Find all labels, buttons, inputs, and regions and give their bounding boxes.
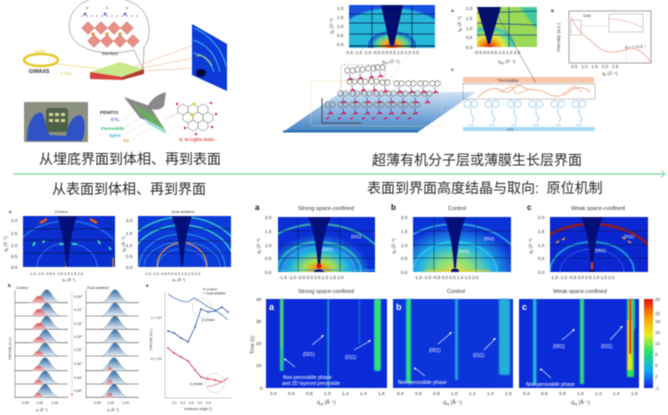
detector pattern <box>192 24 227 91</box>
axis labels: 0.0 <box>265 270 272 275</box>
colorbar: 25 <box>655 297 661 302</box>
line chart B: q <box>602 71 605 76</box>
panel: bottom-left GIWAXS maps <box>2 210 232 282</box>
colorbar: 12 <box>655 341 661 346</box>
time map c <box>519 299 639 388</box>
heatmap: dual additive: 1.0 <box>126 243 133 248</box>
device stack with labels: Au <box>123 138 129 143</box>
time and q axes: 0.8 <box>433 391 440 397</box>
heatmap a: strong space-confined: (001) <box>322 247 333 252</box>
heatmap: control: Control <box>55 209 68 214</box>
axis labels: q <box>528 251 533 254</box>
time map c: (001) <box>553 344 565 350</box>
line chart B: SAM <box>583 14 591 18</box>
GIWAXS heatmap: q <box>329 31 334 34</box>
colorbar: 2 <box>655 374 658 379</box>
GIWAXS heatmap: 0.5 <box>337 33 344 38</box>
control peak stack <box>15 290 68 412</box>
time and q axes: Time (s) <box>250 336 256 354</box>
heatmap: dual additive: 0.5 <box>126 254 133 259</box>
interface schematic C <box>451 16 595 132</box>
time map a <box>266 299 387 388</box>
x-ray beam <box>57 45 194 76</box>
heatmap: control: z <box>5 247 9 249</box>
axis labels: -1.5 -1.0 -0.5 0.0 0.5 1.0 1.5 2.0 <box>414 275 479 280</box>
time and q axes: q <box>571 400 574 406</box>
panel: peak stacks b: b <box>8 283 11 288</box>
heatmap c: weak space-confined: c <box>527 203 532 212</box>
time and q axes: q <box>317 400 320 406</box>
time and q axes: 0.4 <box>523 391 530 397</box>
incidence angle labels: 0.15° <box>74 322 83 326</box>
colorbar: 22 <box>655 311 661 316</box>
heatmap b: control: b <box>391 203 396 212</box>
panel: line chart e: Intensity (a.u.) <box>149 329 153 350</box>
axis labels: -1.5 -1.0 -0.5 0.0 0.5 1.0 1.5 2.0 <box>550 275 615 280</box>
heatmap A: A <box>451 8 454 13</box>
time and q axes: 40 <box>256 297 262 303</box>
time map a: and 2D layered perovskite <box>282 381 340 387</box>
molecular layer on substrate <box>283 48 476 132</box>
panel: top-middle ultrathin molecular layer <box>283 5 476 132</box>
time and q axes: 0.4 <box>270 391 277 397</box>
device stack with labels: ETL <box>111 117 120 122</box>
heading: surface to bulk to interface: 从表面到体相、再到界面 <box>52 181 206 197</box>
axis labels: z <box>393 249 397 251</box>
axis labels: 2.0 <box>538 215 545 220</box>
dual additive peak stack: qᵣ (Å⁻¹) <box>107 407 119 412</box>
GIWAXS heatmap: -2.0 -1.5 -1.0 -0.5 0.0 0.5 1.0 1.5 2.0 <box>345 50 419 55</box>
time map b: (011) <box>473 353 485 359</box>
time and q axes: 1.0 <box>577 391 584 397</box>
icon: SSRF ring: GIWAXS <box>29 69 50 75</box>
line chart B: qₓ ≈ 1.75 Å⁻¹ <box>625 44 646 49</box>
molecule: S,N-CQDs-SnO2: S, N-CQDs-SnO₂ <box>179 137 215 142</box>
panel: top-right molecule and scattering <box>451 6 651 132</box>
colorbar: 6 <box>655 363 658 368</box>
time and q axes: 0.4 <box>397 391 404 397</box>
heatmap A: 1.5 <box>466 16 473 21</box>
time and q axes: 1.0 <box>451 391 458 397</box>
GIWAXS heatmap: 1.5 <box>337 15 344 20</box>
axis labels: 1.5 <box>538 229 545 234</box>
heatmap: control: 0.5 <box>11 254 18 259</box>
panel: top-left buried interface to surface <box>24 0 227 143</box>
panel: time-resolved maps: Control <box>447 289 465 295</box>
incidence angle labels: 0.25° <box>74 348 83 352</box>
heading: buried interface to surface: 从埋底界面到体相、再到表面 <box>39 151 221 167</box>
axis labels: z <box>258 249 262 251</box>
panel: line chart e: Incidence angle (°) <box>184 407 212 411</box>
icon: SSRF ring <box>24 49 58 75</box>
heatmap A: 2.0 <box>466 6 473 11</box>
colorbar: 18 <box>655 319 661 324</box>
control peak stack: qᵣ (Å⁻¹) <box>36 407 48 412</box>
axis labels: -1.5 -1.0 -0.5 0.0 0.5 1.0 1.5 2.0 <box>279 275 344 280</box>
dual additive peak stack <box>86 290 139 412</box>
incidence angle labels: 0.10° <box>74 308 83 312</box>
panel: peak stacks b: Control <box>16 286 28 290</box>
molecule: S,N-CQDs-SnO2 <box>165 102 217 142</box>
callout bubble: interface structure: Interface <box>102 51 119 56</box>
timeline arrow divider <box>13 170 665 178</box>
colorbar: 15 <box>655 330 661 335</box>
heatmap A: 0.5 <box>466 35 473 40</box>
heatmap: dual additive: -1.5 -1.0 -0.5 0.0 0.5 1.0 1.5 2.0 <box>144 271 201 276</box>
time and q axes: xy <box>320 402 324 406</box>
time map b: Non-perovskite phase <box>398 380 447 386</box>
incidence angle labels: 0.05° <box>74 295 83 299</box>
GIWAXS heatmap: xy <box>385 61 388 65</box>
heatmap: dual additive: 1.5 <box>126 231 133 236</box>
time and q axes: 0.6 <box>415 391 422 397</box>
heatmap: control: q <box>3 249 8 252</box>
line chart B <box>551 8 651 77</box>
axis labels: 1.0 <box>401 243 408 248</box>
heatmap A: (Å⁻¹) <box>456 16 462 28</box>
axis labels <box>255 215 615 280</box>
dual additive peak stack: 1.03 <box>122 401 129 405</box>
time and q axes: 0.8 <box>306 391 313 397</box>
callout bubble: interface structure <box>69 0 149 69</box>
line chart B: 0.5 1.0 1.5 2.0 2.5 <box>571 64 619 69</box>
control peak stack: 1.05 <box>51 401 58 405</box>
time map c: (011) <box>601 344 613 350</box>
heatmap c: weak space-confined: Weak space-confined <box>571 206 625 212</box>
heatmap: control <box>2 210 116 282</box>
incidence angle labels: 0.50° <box>74 389 83 393</box>
heatmap b: control <box>390 203 512 273</box>
time and q axes: (Å⁻¹) <box>449 399 462 406</box>
heatmap: control: 1.0 <box>11 243 18 248</box>
series lines <box>167 294 229 392</box>
heatmap: control: a <box>9 209 12 214</box>
time and q axes <box>250 297 638 406</box>
heatmap: dual additive: Dual additive <box>171 209 195 214</box>
axis labels: (Å⁻¹) <box>390 238 396 250</box>
time map a: Non-perovskite phase <box>283 375 332 381</box>
heatmap: dual additive: q <box>121 249 126 252</box>
legend: Dual additive <box>206 292 226 296</box>
time and q axes: 1.0 <box>324 391 331 397</box>
heatmap: dual additive: z <box>123 247 127 249</box>
heatmap a: strong space-confined: (011) <box>351 234 362 239</box>
device stack with labels: Spiro <box>109 133 121 138</box>
heatmap b: control: (011) <box>484 236 495 241</box>
panel: line chart e: 0.1 0.2 0.3 0.4 0.5 <box>172 401 211 405</box>
axis labels: (Å⁻¹) <box>255 238 261 250</box>
time and q axes: 0 <box>260 386 263 392</box>
heatmap A: q <box>498 59 501 64</box>
axis labels: 1.5 <box>401 229 408 234</box>
incidence angle labels: 0.20° <box>74 335 83 339</box>
x-ray beam: X-Ray <box>60 71 73 76</box>
time and q axes: 0.6 <box>541 391 548 397</box>
panel: line chart e: 1 × 10⁴ <box>151 316 163 320</box>
axis labels: 1.0 <box>265 243 272 248</box>
colorbar <box>644 297 661 391</box>
device stack with labels <box>100 92 166 143</box>
dual additive peak stack: 1.02 <box>107 401 114 405</box>
time map a: (001) <box>303 352 315 358</box>
line chart B: B <box>551 8 554 13</box>
time map c: c <box>522 302 527 312</box>
GIWAXS heatmap <box>328 4 436 66</box>
time map a: (011) <box>345 355 357 361</box>
heatmap a: strong space-confined: a <box>255 203 260 212</box>
device stack with labels: Perovskite <box>101 126 125 131</box>
time and q axes: 1.2 <box>342 391 349 397</box>
colorbar: -1 <box>655 386 660 391</box>
control peak stack: 1.00 <box>36 401 43 405</box>
panel: peak stacks b: Dual additive <box>87 286 109 290</box>
axis labels: q <box>256 251 261 254</box>
heatmap b: control: Control <box>448 206 466 212</box>
heatmap: control: -1.5 -1.0 -0.5 0 0.5 1.0 1.5 2.0 <box>29 271 84 276</box>
panel: time-resolved maps <box>250 289 661 406</box>
GIWAXS heatmap: 1.0 <box>337 24 344 29</box>
heatmap A: z <box>459 27 463 29</box>
time and q axes: 20 <box>256 341 262 347</box>
panel: peak stacks b <box>8 283 139 412</box>
time map a: a <box>269 302 275 312</box>
time and q axes: 1.6 <box>505 391 512 397</box>
incidence angle labels <box>71 292 83 396</box>
time and q axes: 1.4 <box>487 391 494 397</box>
dual additive peak stack: 0.99 <box>94 401 101 405</box>
axis labels: 0.5 <box>538 256 545 261</box>
panel: time-resolved maps: Weak space-confined <box>553 289 607 295</box>
incidence angle labels: 0.40° <box>74 376 83 380</box>
legend: Control <box>206 288 217 292</box>
time and q axes: 0.8 <box>559 391 566 397</box>
time map b: b <box>396 302 402 312</box>
time and q axes: xy <box>574 402 578 406</box>
time and q axes: xy <box>446 402 450 406</box>
heatmap: dual additive: qₓᵧ (Å⁻¹) <box>172 277 185 282</box>
heatmap A: xy <box>501 61 504 65</box>
axis labels: 0.0 <box>538 270 545 275</box>
GIWAXS heatmap: 2.0 <box>337 6 344 11</box>
axis labels: q <box>391 251 396 254</box>
axis labels: 1.5 <box>265 229 272 234</box>
time and q axes: 1.4 <box>360 391 367 397</box>
axis labels: 0.5 <box>401 256 408 261</box>
interface schematic C: Perovskite <box>498 78 519 83</box>
heatmap A: q <box>457 29 462 32</box>
panel: line chart e <box>146 283 232 411</box>
panel: line chart e: α phase <box>190 382 203 386</box>
panel: line chart e: β phase <box>202 318 215 322</box>
panel: time-resolved maps: Strong space-confined <box>298 289 354 295</box>
heatmap a: strong space-confined <box>254 204 376 273</box>
heatmap c: weak space-confined: (001) <box>595 248 606 253</box>
heatmap: dual additive: 0.0 <box>126 265 133 270</box>
axis labels: 0.5 <box>265 256 272 261</box>
line chart B: Intensity (a.u.) <box>556 22 561 52</box>
axis labels: z <box>530 249 534 251</box>
axis labels: 1.0 <box>538 243 545 248</box>
heatmap: control: qₓᵧ (Å⁻¹) <box>62 277 75 282</box>
GIWAXS heatmap: z <box>331 29 335 31</box>
time and q axes: 1.4 <box>613 391 620 397</box>
heatmap A: -0.5 0.0 0.5 1.0 1.5 2.0 <box>474 50 521 55</box>
time and q axes: 0.6 <box>288 391 295 397</box>
time and q axes: 1.6 <box>631 391 638 397</box>
time map b <box>393 299 513 388</box>
heatmap A: 1.0 <box>466 26 473 31</box>
axis labels: (Å⁻¹) <box>527 238 533 250</box>
GIWAXS heatmap: 0.0 <box>337 42 344 47</box>
time and q axes: (Å⁻¹) <box>323 399 336 406</box>
line chart B: (Å⁻¹) <box>606 70 618 76</box>
panel: in situ GIWAXS maps <box>254 203 649 280</box>
GIWAXS heatmap: (Å⁻¹) <box>388 58 400 64</box>
photo: flexible device in gloved hand <box>24 102 88 142</box>
colorbar: 9 <box>655 352 658 357</box>
GIWAXS heatmap: q <box>382 59 385 64</box>
heatmap a: strong space-confined: Strong space-confined <box>298 206 354 212</box>
legend <box>203 288 226 296</box>
heatmap c: weak space-confined: (011) <box>624 234 635 239</box>
GIWAXS heatmap: (Å⁻¹) <box>328 18 334 30</box>
time and q axes: (Å⁻¹) <box>577 399 590 406</box>
heatmap: dual additive: (Å⁻¹) <box>120 236 126 248</box>
time and q axes: 10 <box>256 363 262 369</box>
axis labels: 2.0 <box>401 215 408 220</box>
control peak stack: 0.99 <box>22 401 29 405</box>
device stack with labels: PEN/ITO <box>100 110 119 115</box>
sample film <box>90 62 144 80</box>
panel: line chart e: 5 × 10³ <box>151 357 163 361</box>
time and q axes: 1.2 <box>595 391 602 397</box>
panel: line chart e: e <box>146 283 149 288</box>
line chart B: z <box>605 73 607 77</box>
interface schematic C: C <box>451 67 454 72</box>
panel: peak stacks b: Intensity (a.u.) <box>8 337 12 360</box>
heatmap: control: 1.5 <box>11 231 18 236</box>
heatmap: control: 2.0 <box>11 218 18 223</box>
icon: SSRF ring: SSRF <box>34 49 46 54</box>
heatmap: dual additive: 2.0 <box>126 218 133 223</box>
interface schematic C: ITO <box>507 128 513 132</box>
heading: in situ mechanism: 表面到界面高度结晶与取向: 原位机制 <box>367 180 603 196</box>
heatmap A <box>451 6 537 67</box>
axis labels: 0.0 <box>401 270 408 275</box>
time and q axes: 1.6 <box>378 391 385 397</box>
time and q axes: 1.2 <box>469 391 476 397</box>
heatmap A: (Å⁻¹) <box>504 58 516 64</box>
heatmap A: 0.0 <box>466 45 473 50</box>
incidence angle labels: 0.30° <box>74 362 83 366</box>
heatmap: dual additive <box>120 210 232 282</box>
axis labels: 2.0 <box>265 215 272 220</box>
heatmap: control: 0.0 <box>11 265 18 270</box>
heatmap c: weak space-confined <box>526 204 649 273</box>
heading: ultrathin molecular layer: 超薄有机分子层或薄膜生长层界面 <box>372 152 582 168</box>
time map b: (001) <box>429 348 441 354</box>
time and q axes: q <box>443 400 446 406</box>
time and q axes: 30 <box>256 319 262 325</box>
time map c: Non-perovskite phase <box>526 382 575 388</box>
heatmap: control: (Å⁻¹) <box>2 236 8 248</box>
heatmap b: control: (001) <box>459 249 470 254</box>
